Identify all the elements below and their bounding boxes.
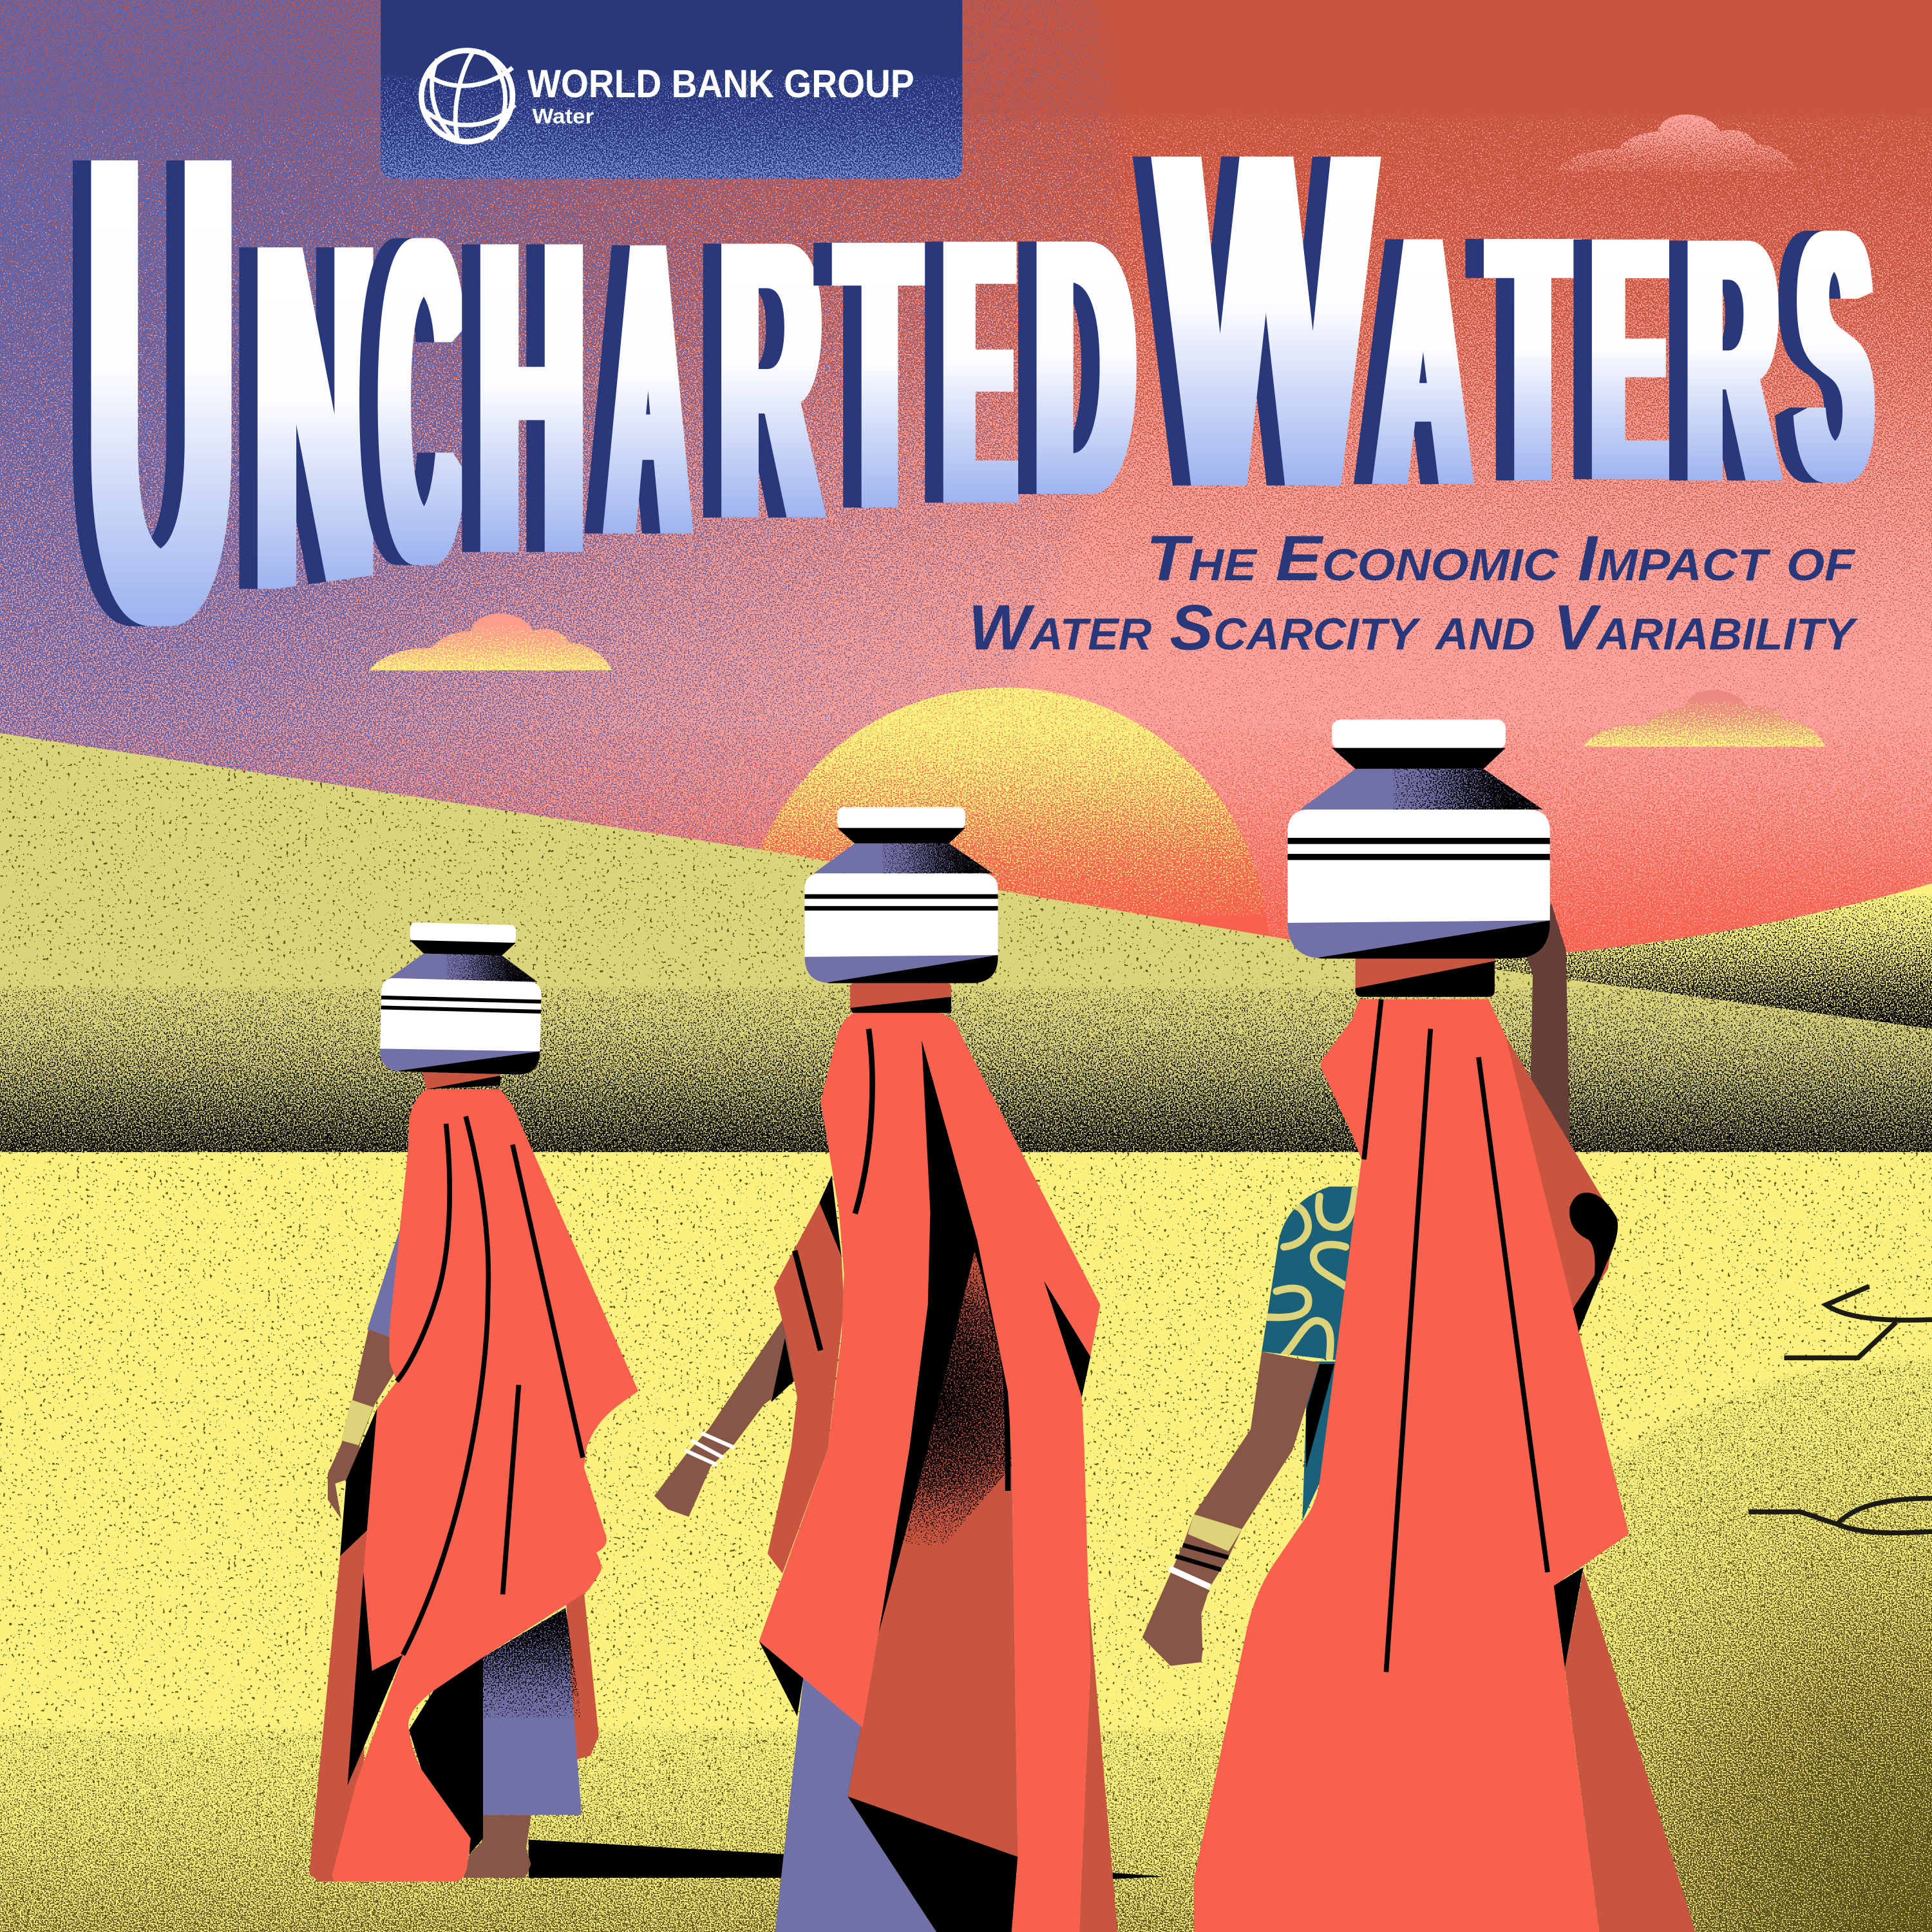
drape curl xyxy=(1569,1193,1618,1333)
neck cloth xyxy=(1356,954,1495,997)
right distant hill xyxy=(1306,884,1932,1059)
right dark strip xyxy=(1079,1589,1117,1932)
title: E xyxy=(1593,164,1667,554)
subtitle: The Economic Impact of xyxy=(1146,523,1856,594)
cloud: left xyxy=(370,614,612,670)
shoulder shadow xyxy=(1352,1110,1368,1159)
left foreground hill xyxy=(0,733,1932,1153)
bangles xyxy=(685,1433,734,1465)
title: W xyxy=(1159,52,1375,587)
title: A xyxy=(609,155,688,623)
arm and hand xyxy=(328,1329,397,1519)
bracelet xyxy=(341,1399,374,1445)
sleeve xyxy=(367,1231,406,1337)
black notch xyxy=(1044,1280,1090,1397)
cloud: upper right xyxy=(1556,115,1799,171)
foot xyxy=(463,1815,531,1878)
cloud: lower right xyxy=(1584,690,1826,746)
dark sari panel xyxy=(848,1252,1018,1857)
title: R xyxy=(721,157,820,602)
sari xyxy=(759,1012,1101,1932)
ground flecks xyxy=(0,727,1932,1932)
figure: woman right xyxy=(1142,719,1696,1932)
ground cracks xyxy=(1748,1286,1932,1533)
rear hem xyxy=(565,1592,599,1759)
sky background xyxy=(0,0,1932,986)
title: C xyxy=(382,144,461,659)
teal bodice xyxy=(1302,1361,1337,1520)
skirt shadow xyxy=(1554,1567,1584,1669)
back drape xyxy=(309,1529,368,1882)
subtitle: Water Scarcity and Variability xyxy=(969,592,1858,663)
title: T xyxy=(839,160,920,590)
water pot xyxy=(1287,719,1550,973)
title: D xyxy=(1036,162,1133,573)
sleeve xyxy=(768,1202,844,1573)
sari fold lines xyxy=(397,1116,583,1655)
neck cloth xyxy=(421,1067,500,1089)
arm shadow xyxy=(772,1338,793,1402)
title: S xyxy=(1799,156,1870,555)
back drape shadow xyxy=(340,1408,377,1556)
sari xyxy=(1194,999,1629,1932)
organisation name: WORLD BANK GROUP xyxy=(527,62,914,106)
department name: Water xyxy=(533,104,594,128)
icon: globe xyxy=(421,50,515,142)
central shadow xyxy=(848,1040,1018,1932)
sari xyxy=(332,1089,638,1882)
figure: woman centre xyxy=(654,807,1117,1932)
sari fold lines xyxy=(1364,999,1548,1672)
title: E xyxy=(945,159,1014,583)
patterned blouse xyxy=(1257,1183,1368,1368)
right skirt xyxy=(1565,1571,1696,1932)
title: R xyxy=(1688,166,1777,555)
title xyxy=(88,16,1870,762)
raised arm xyxy=(1527,903,1570,1146)
water pot xyxy=(379,922,544,1084)
violet skirt xyxy=(471,1608,582,1815)
skirt shadow xyxy=(409,1657,483,1839)
title: N xyxy=(255,140,376,695)
figure: woman left xyxy=(309,922,638,1882)
title: T xyxy=(1491,162,1575,555)
fold line xyxy=(855,1029,872,1214)
arm xyxy=(654,1316,796,1517)
violet skirt xyxy=(775,1678,936,1932)
title: A xyxy=(1378,162,1469,560)
neck cloth xyxy=(850,983,951,1013)
bodice shadow xyxy=(1306,1364,1334,1469)
logo panel xyxy=(381,0,962,178)
water pot xyxy=(804,807,998,994)
sun xyxy=(739,688,1269,1217)
bangles xyxy=(1170,1514,1242,1587)
sleeve line xyxy=(795,1251,820,1350)
hem shadow xyxy=(759,1641,803,1716)
ground shadow xyxy=(529,1840,1166,1879)
fold line xyxy=(976,1240,1008,1491)
inner shadow xyxy=(348,1572,403,1785)
shoulder drape xyxy=(1506,1036,1616,1325)
title: U xyxy=(88,16,235,762)
arm and hand xyxy=(1142,1352,1320,1666)
shoulder shadow xyxy=(819,1175,842,1257)
desert ground xyxy=(0,1152,1932,1932)
title: H xyxy=(479,147,584,647)
subtitle xyxy=(969,523,1858,663)
